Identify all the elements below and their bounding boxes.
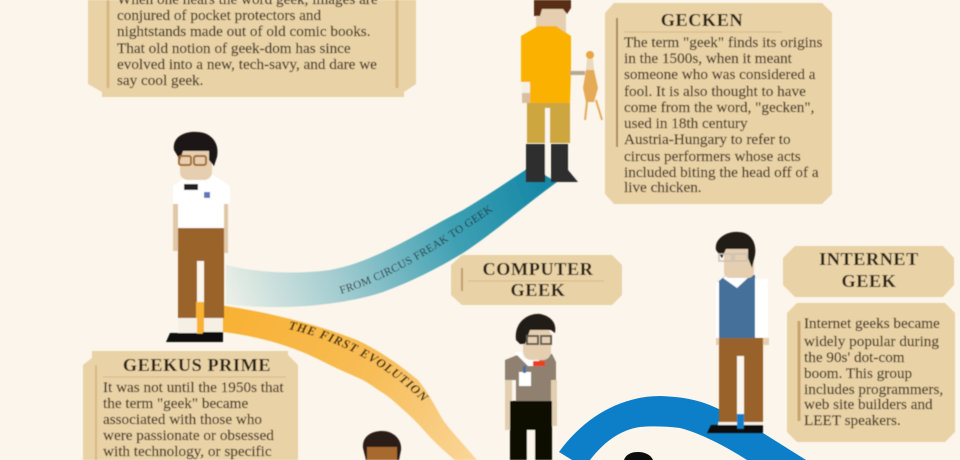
internet geek text: boom. This group: [804, 365, 912, 382]
geekus prime text: the term "geek" became: [103, 395, 248, 412]
heading: computer geek: COMPUTER: [483, 259, 594, 279]
figure: gecken man with chicken: [521, 0, 602, 182]
intro text: [117, 0, 378, 89]
internet geek text: the 90s' dot-com: [804, 349, 905, 366]
icon: chicken: [583, 51, 602, 120]
figure: partial head, blue arc: [624, 452, 653, 460]
figure: computer geek: [505, 314, 557, 460]
panel: internet geek: [787, 303, 955, 442]
internet geek text: web site builders and: [804, 396, 933, 413]
heading: internet geek: [819, 249, 919, 291]
gecken text: live chicken.: [624, 179, 702, 196]
figure: partial head, orange ribbon: [363, 431, 401, 460]
internet geek text: [804, 315, 943, 429]
heading: computer geek: [483, 259, 594, 300]
gecken text: come from the word, "gecken",: [624, 99, 814, 116]
gecken text: included biting the head off of a: [624, 164, 819, 181]
gecken text: Austria-Hungary to refer to: [624, 131, 791, 148]
internet geek text: LEET speakers.: [804, 412, 901, 429]
gecken text: circus performers whose acts: [624, 148, 801, 165]
gecken text: The term "geek" finds its origins: [624, 34, 822, 51]
geekus prime text: It was not until the 1950s that: [103, 379, 284, 396]
panel: internet geek heading: [783, 246, 954, 297]
ribbon: from circus freak to geek: [226, 168, 558, 308]
geekus prime text: associated with those who: [103, 411, 262, 428]
heading: internet geek: INTERNET: [819, 249, 919, 269]
panel: computer geek: [451, 255, 622, 305]
gecken text: [624, 34, 822, 196]
panel: geekus prime: [83, 351, 298, 460]
gecken text: fool. It is also thought to have: [624, 83, 806, 100]
intro text: evolved into a new, tech-savy, and dare we: [117, 56, 377, 73]
internet geek text: Internet geeks became: [804, 315, 940, 332]
geekus prime text: [103, 379, 284, 460]
figure: internet geek: [707, 232, 769, 433]
heading: internet geek: GEEK: [842, 271, 896, 291]
panel: intro: [88, 0, 416, 97]
ribbon label: the first evolution: THE FIRST EVOLUTION: [288, 320, 430, 402]
figure: geekus prime: [166, 132, 230, 342]
intro text: say cool geek.: [117, 72, 203, 89]
gecken text: in the 1500s, when it meant: [624, 50, 793, 67]
panel: gecken: [605, 3, 832, 204]
heading: gecken: GECKEN: [661, 10, 743, 30]
gecken text: someone who was considered a: [624, 66, 816, 83]
ribbon: blue arc: [559, 396, 806, 460]
internet geek text: includes programmers,: [804, 381, 943, 398]
heading: computer geek: GEEK: [511, 280, 565, 300]
internet geek text: widely popular during: [804, 333, 939, 350]
geekus prime text: were passionate or obsessed: [103, 427, 274, 444]
geekus prime text: with technology, or specific: [103, 443, 272, 460]
intro text: conjured of pocket protectors and: [117, 7, 322, 24]
intro text: nightstands made out of old comic books.: [117, 23, 371, 40]
gecken text: used in 18th century: [624, 115, 748, 132]
ribbon: the first evolution: [196, 305, 477, 460]
intro text: That old notion of geek-dom has since: [117, 40, 351, 57]
heading: geekus prime: GEEKUS PRIME: [123, 355, 271, 375]
ribbon label: from circus freak to geek: FROM CIRCUS FREAK TO GEEK: [338, 205, 493, 294]
